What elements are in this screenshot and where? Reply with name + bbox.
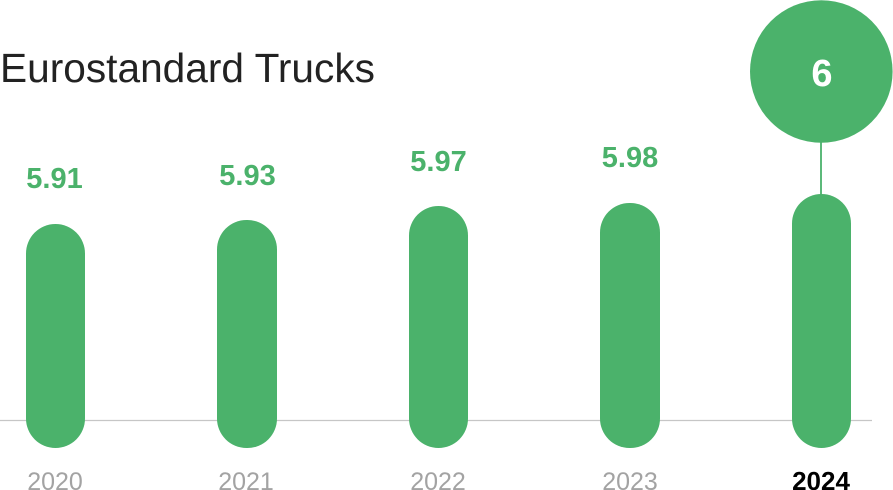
bar: 2020: [26, 163, 85, 490]
bar: 2023: [600, 142, 660, 490]
bar: 2021: 5.93: [219, 160, 276, 192]
baseline: [0, 420, 872, 422]
bar: 2020: 5.91: [26, 163, 83, 195]
title: Eurostandard Trucks: [0, 45, 375, 91]
bar: 2024 highlighted: [750, 0, 893, 490]
bar: 2022: 5.97: [410, 146, 467, 178]
bar: 2022: [409, 146, 468, 490]
bar: 2021: [217, 160, 277, 490]
bar: 2023: 5.98: [602, 142, 658, 174]
bar: 2024 highlighted: 6: [811, 53, 833, 95]
